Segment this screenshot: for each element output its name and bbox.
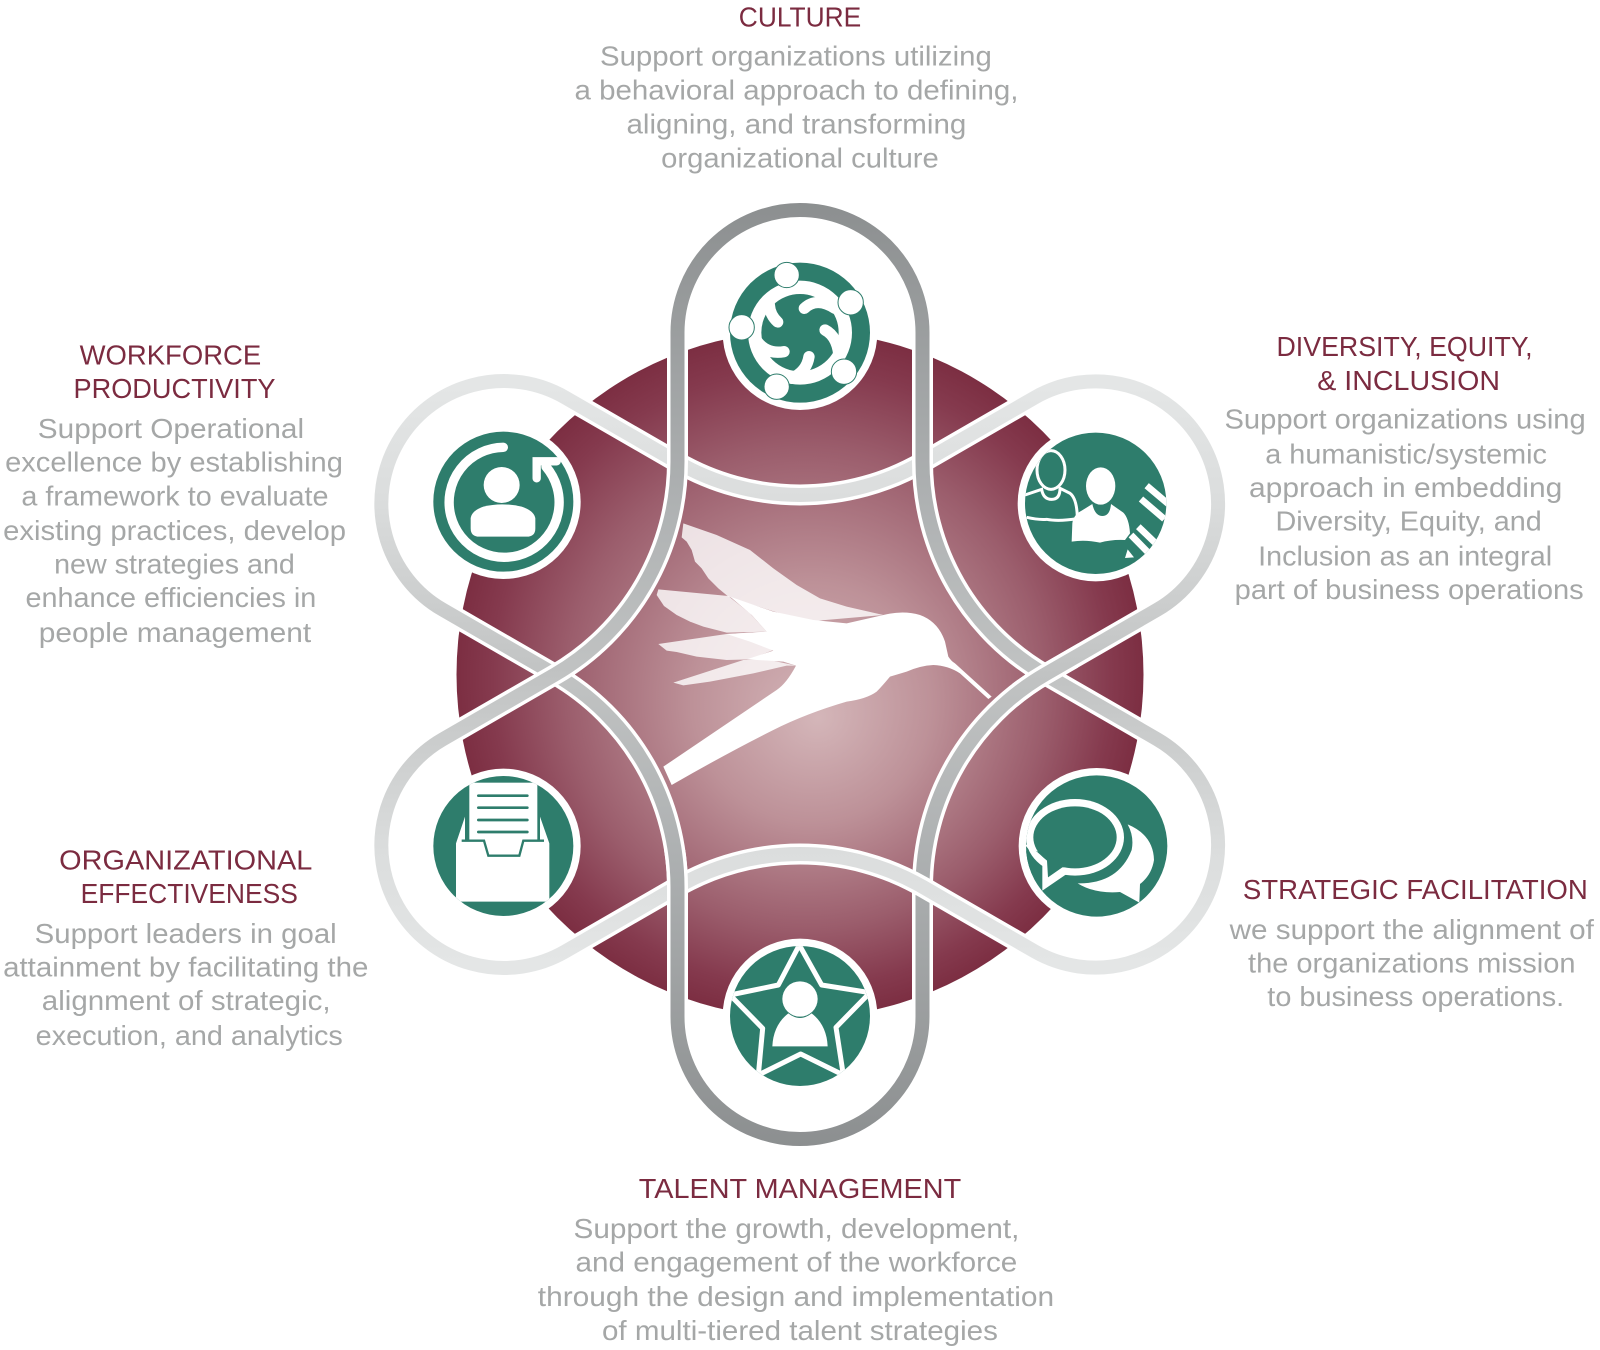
text: diversity, equity, inclusion: Support organizations using [1224, 404, 1586, 435]
icon: person with refresh arrow [426, 424, 581, 579]
text: diversity, equity, inclusion: a humanistic/systemic [1265, 438, 1547, 469]
text: organizational effectiveness: EFFECTIVENESS [81, 878, 298, 909]
text: diversity, equity, inclusion: & INCLUSION [1317, 365, 1500, 396]
text: organizational effectiveness: execution, and analytics [36, 1020, 343, 1051]
text: workforce productivity: people management [39, 617, 312, 648]
text: organizational effectiveness: attainment by facilitating the [3, 952, 368, 982]
ribbon: light lobes and lower pill [381, 381, 1218, 1139]
text: workforce productivity: existing practices, develop [3, 515, 346, 546]
text: workforce productivity: a framework to evaluate [21, 481, 329, 512]
text: diversity, equity, inclusion [1224, 331, 1586, 605]
text: culture [574, 2, 1018, 174]
text: organizational effectiveness [3, 844, 368, 1051]
text: workforce productivity: new strategies and [54, 548, 295, 580]
ribbon weave overlaps [664, 644, 1078, 903]
text: diversity, equity, inclusion: part of business operations [1235, 574, 1584, 605]
text: workforce productivity: PRODUCTIVITY [74, 373, 276, 404]
text: strategic facilitation: the organizations mission [1248, 948, 1576, 978]
text: talent management: and engagement of the workforce [576, 1246, 1017, 1277]
text: talent management: of multi-tiered talent strategies [602, 1315, 998, 1346]
text: talent management: through the design and implementation [538, 1281, 1054, 1312]
text: culture: Support organizations utilizing [600, 40, 992, 72]
text: workforce productivity: excellence by establishing [5, 446, 343, 478]
text: diversity, equity, inclusion: approach in embedding [1249, 472, 1562, 503]
text: workforce productivity: WORKFORCE [80, 339, 261, 370]
text: culture: a behavioral approach to defining, [574, 74, 1018, 106]
icon: culture circle of people [723, 255, 877, 410]
text: talent management [538, 1173, 1054, 1346]
icon: person in star [723, 939, 877, 1093]
text: culture: CULTURE [739, 2, 861, 32]
icon: speech bubbles [1019, 768, 1175, 924]
text: workforce productivity [3, 339, 346, 648]
text: organizational effectiveness: ORGANIZATIONAL [59, 844, 312, 875]
text: strategic facilitation: to business operations. [1267, 981, 1564, 1012]
text: diversity, equity, inclusion: Inclusion as an integral [1258, 540, 1552, 571]
text: strategic facilitation: we support the alignment of [1229, 914, 1594, 945]
text: culture: aligning, and transforming [626, 108, 966, 140]
dove [657, 523, 992, 785]
icon: two people with stripes [1018, 425, 1174, 581]
text: talent management: Support the growth, development, [574, 1213, 1019, 1244]
text: culture: organizational culture [661, 142, 939, 174]
text: workforce productivity: Support Operational [38, 413, 304, 444]
text: organizational effectiveness: Support leaders in goal [35, 918, 337, 949]
ribbon: upper pill and lower lobes [381, 210, 1218, 968]
central maroon disc [456, 331, 1144, 1018]
text: workforce productivity: enhance efficiencies in [26, 582, 316, 613]
text: strategic facilitation [1229, 874, 1594, 1012]
text: talent management: TALENT MANAGEMENT [639, 1173, 961, 1204]
icon: document in tray [426, 769, 581, 923]
text: diversity, equity, inclusion: Diversity, Equity, and [1276, 506, 1542, 537]
text: diversity, equity, inclusion: DIVERSITY, EQUITY, [1276, 331, 1533, 362]
text: strategic facilitation: STRATEGIC FACILITATION [1243, 874, 1588, 905]
text: organizational effectiveness: alignment of strategic, [42, 985, 331, 1016]
